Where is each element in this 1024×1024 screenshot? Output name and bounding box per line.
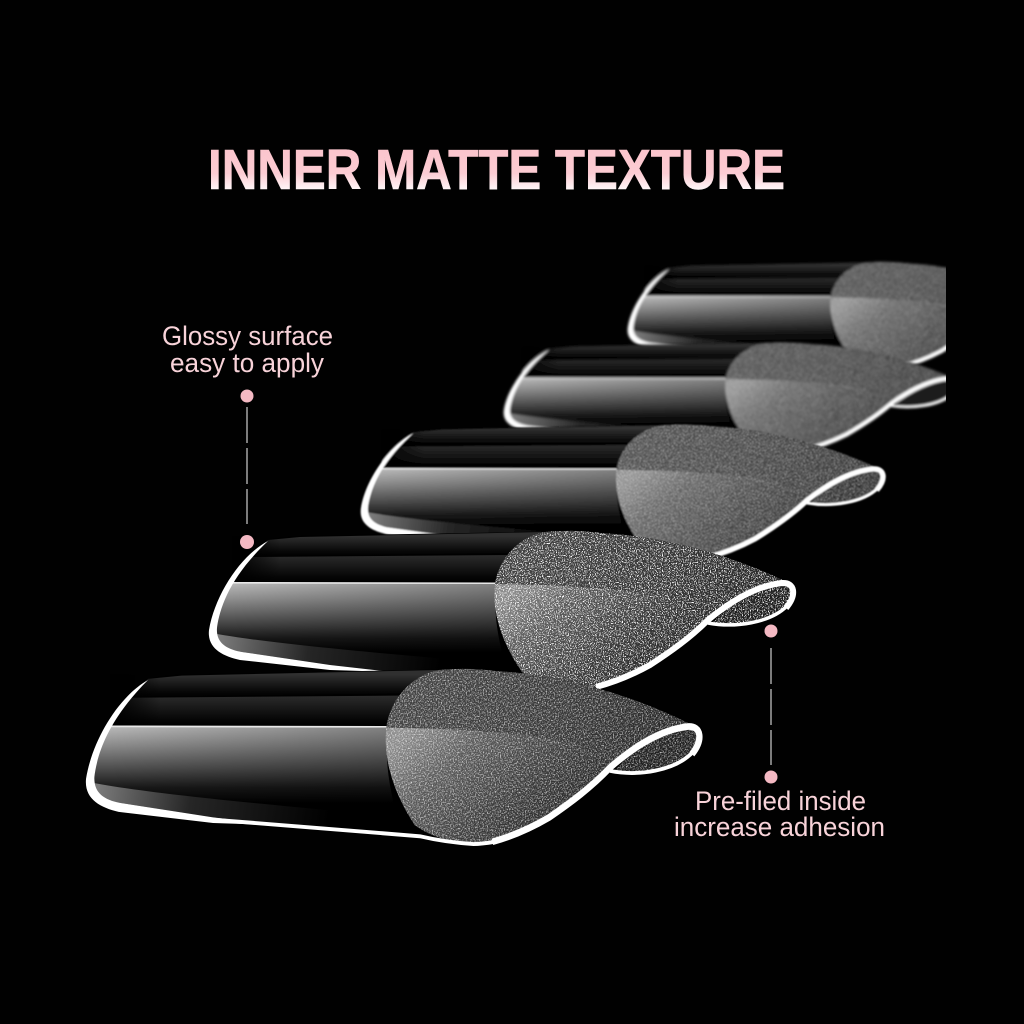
dot: nail tip marker — [764, 624, 778, 638]
nail 3 — [361, 424, 883, 559]
dashed leader line — [770, 648, 772, 765]
matte pre-filed tip of nail 4 — [494, 531, 785, 689]
callout line: increase adhesion: increase adhesion — [674, 812, 885, 842]
dot: nail edge marker — [240, 535, 254, 549]
nail 5 (front) — [86, 669, 699, 844]
dot: top marker — [240, 390, 254, 402]
callout line: easy to apply: easy to apply — [170, 348, 324, 378]
dashed leader line — [246, 407, 248, 524]
dot: lower marker — [764, 770, 778, 784]
title: INNER MATTE TEXTURE — [208, 138, 785, 201]
inner opening of nail 4 — [712, 583, 793, 625]
nail 2 — [504, 342, 957, 451]
callout line: Pre-filed inside: Pre-filed inside — [695, 786, 866, 816]
callout: glossy surface — [162, 321, 333, 549]
white rim of nail 4 — [209, 541, 793, 687]
callout: pre-filed inside — [674, 624, 885, 842]
callout line: Glossy surface: Glossy surface — [162, 321, 333, 351]
nail 1 (back) — [626, 260, 946, 366]
nail 4 (in focus) — [209, 531, 793, 689]
